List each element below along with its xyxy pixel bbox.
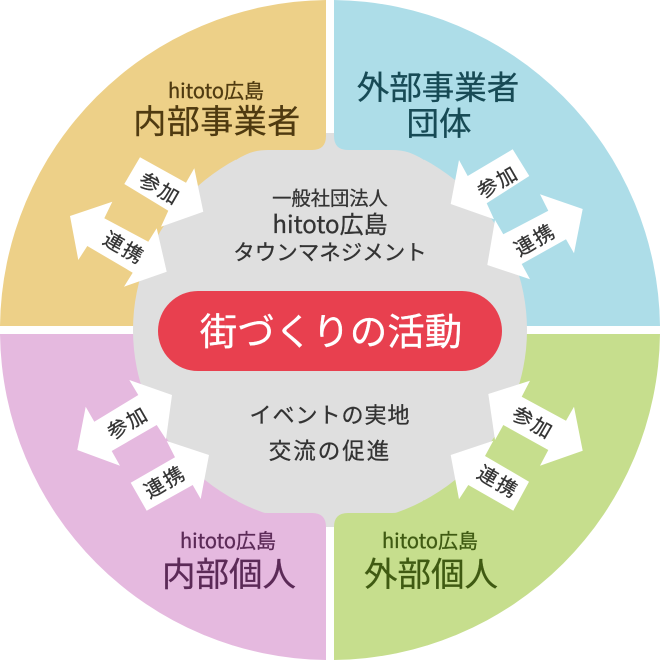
label: outer individuals — [364, 525, 498, 596]
label: inner businesses: hitoto広島 — [168, 75, 264, 104]
panel: inner businesses quadrant — [0, 0, 326, 326]
main pill: town-making activities: 街づくりの活動 — [200, 301, 462, 356]
arrow: bottom right participation — [488, 381, 583, 466]
arrow: top left collaboration: 連携 — [98, 223, 151, 270]
arrow: top right participation — [451, 149, 529, 219]
main pill: town-making activities — [158, 291, 502, 371]
label: outer business groups: 団体 — [406, 98, 472, 145]
text: event and exchange — [249, 398, 411, 466]
panel: outer business groups quadrant — [334, 0, 660, 326]
text: organisation name: hitoto広島 — [272, 205, 388, 240]
label: outer business groups: 外部事業者 — [357, 62, 519, 109]
arrow: top left collaboration — [70, 202, 167, 287]
arrow: bottom left collaboration — [131, 441, 209, 511]
text: organisation name: タウンマネジメント — [233, 236, 427, 267]
arrow: top right collaboration — [487, 194, 583, 279]
label: outer individuals: hitoto広島 — [382, 525, 478, 554]
panel: outer individuals quadrant — [334, 334, 660, 660]
text: organisation name — [233, 183, 427, 267]
arrow: top right collaboration: 連携 — [508, 215, 561, 262]
panel: inner individuals quadrant — [0, 334, 326, 660]
quadrant tab: bottom right — [334, 500, 440, 560]
arrow: bottom right collaboration — [451, 441, 529, 511]
arrow: bottom left participation — [77, 380, 172, 466]
label: inner individuals: hitoto広島 — [180, 525, 276, 554]
label: inner businesses: 内部事業者 — [133, 95, 301, 143]
arrow: bottom right participation: 参加 — [507, 398, 560, 445]
label: inner individuals — [162, 525, 296, 596]
arrow: top left participation — [124, 157, 203, 227]
arrow: bottom left collaboration: 連携 — [138, 457, 191, 504]
quadrant tab: bottom left — [220, 500, 326, 560]
arrow: bottom right collaboration: 連携 — [472, 457, 525, 504]
gray centre shape — [133, 133, 527, 527]
arrow: top right participation: 参加 — [471, 157, 524, 204]
text: organisation name: 一般社団法人 — [272, 183, 388, 211]
arrow: top left participation: 参加 — [134, 164, 187, 211]
quadrant tab: top right — [334, 100, 440, 160]
text: event and exchange: 交流の促進 — [269, 434, 391, 466]
arrow: bottom left participation: 参加 — [101, 398, 154, 445]
label: outer business groups — [357, 62, 519, 145]
quadrant tab: top left — [220, 100, 326, 160]
text: event and exchange: イベントの実地 — [249, 398, 411, 430]
label: outer individuals: 外部個人 — [364, 547, 498, 596]
label: inner individuals: 内部個人 — [162, 547, 296, 596]
